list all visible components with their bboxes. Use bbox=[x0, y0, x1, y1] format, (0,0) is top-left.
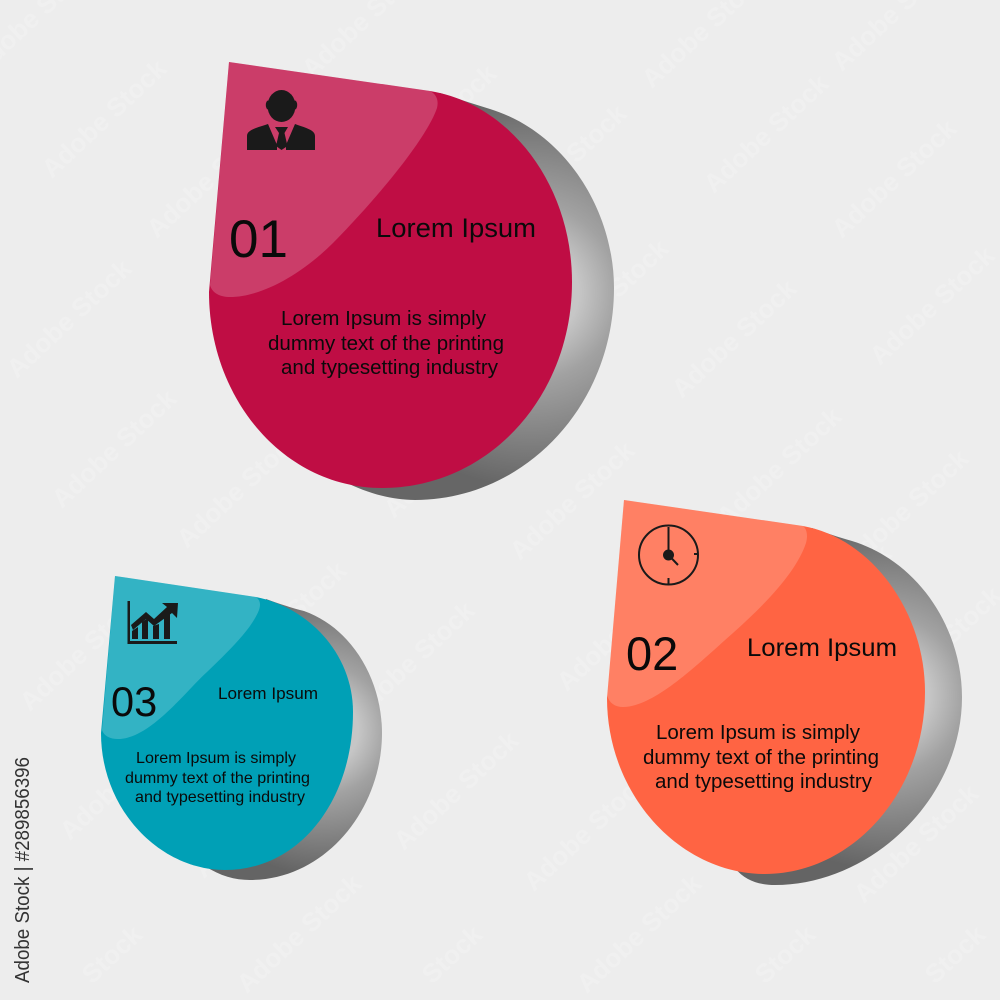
stock watermark pattern: Adobe Stock bbox=[141, 113, 278, 244]
stock watermark pattern: Adobe Stock bbox=[698, 68, 835, 199]
body text 02: and typesetting industry bbox=[655, 771, 873, 793]
stock watermark pattern: Adobe Stock bbox=[206, 223, 343, 354]
stock watermark pattern: Adobe Stock bbox=[711, 401, 848, 532]
drop body 02 bbox=[607, 500, 925, 874]
panel: drop 02 bbox=[607, 500, 962, 885]
stock watermark pattern: Adobe Stock bbox=[496, 98, 633, 229]
stock watermark pattern: Adobe Stock bbox=[378, 393, 515, 524]
3D side shadow 02 bbox=[735, 528, 962, 885]
body text 01: and typesetting industry bbox=[281, 357, 499, 379]
stock watermark pattern: Adobe Stock bbox=[366, 58, 503, 189]
body text 03: Lorem Ipsum is simply bbox=[136, 750, 296, 767]
stock watermark pattern: Adobe Stock bbox=[848, 778, 985, 909]
stock watermark pattern: Stock bbox=[76, 919, 148, 989]
stock watermark pattern: Adobe Stock bbox=[344, 595, 481, 726]
highlight 01 bbox=[210, 62, 438, 297]
stock watermark pattern: Adobe Stock bbox=[54, 715, 191, 846]
icon: businessman bbox=[247, 90, 315, 150]
stock watermark pattern: Adobe Stock bbox=[518, 766, 655, 897]
panel: drop 01 bbox=[209, 62, 614, 500]
stock watermark pattern: Adobe Stock bbox=[838, 443, 975, 574]
number 01: 01 bbox=[229, 210, 288, 269]
icon: growth chart bbox=[128, 601, 178, 644]
body text 03 bbox=[125, 750, 310, 806]
stock watermark pattern: Adobe Stock bbox=[538, 233, 675, 364]
body text 02 bbox=[643, 722, 879, 793]
stock watermark pattern: Adobe Stock bbox=[551, 566, 688, 697]
number 02: 02 bbox=[626, 627, 678, 680]
body text 01: dummy text of the printing bbox=[268, 333, 504, 355]
stock watermark pattern: Adobe Stock bbox=[388, 725, 525, 856]
stock watermark pattern: Adobe Stock bbox=[826, 113, 963, 244]
body text 03: dummy text of the printing bbox=[125, 770, 310, 787]
heading 01: Lorem Ipsum bbox=[376, 213, 536, 243]
stock watermark pattern: Adobe Stock bbox=[216, 555, 353, 686]
3D side shadow 01 bbox=[345, 93, 614, 500]
drop body 03 bbox=[101, 576, 353, 870]
stock watermark pattern: Adobe Stock bbox=[231, 868, 368, 999]
stock watermark pattern: Stock bbox=[919, 919, 991, 989]
stock watermark pattern: Adobe Stock bbox=[666, 273, 803, 404]
stock watermark pattern: Adobe Stock bbox=[188, 753, 325, 884]
highlight 02 bbox=[607, 500, 807, 707]
stock watermark pattern: Stock bbox=[749, 919, 821, 989]
stock watermark pattern: Adobe Stock bbox=[761, 538, 898, 669]
panel: drop 03 bbox=[101, 576, 382, 880]
stock watermark pattern: Adobe Stock bbox=[36, 53, 173, 184]
stock watermark pattern: Adobe Stock bbox=[719, 738, 856, 869]
stock watermark pattern: Adobe Stock bbox=[571, 868, 708, 999]
stock watermark pattern: Adobe Stock bbox=[46, 383, 183, 514]
highlight 03 bbox=[102, 576, 260, 739]
stock watermark pattern: Adobe Stock bbox=[171, 423, 308, 554]
body text 03: and typesetting industry bbox=[135, 789, 305, 806]
body text 01: Lorem Ipsum is simply bbox=[281, 308, 487, 330]
stock id label: Adobe Stock | #289856396 bbox=[12, 757, 34, 983]
body text 02: Lorem Ipsum is simply bbox=[656, 722, 861, 744]
body text 02: dummy text of the printing bbox=[643, 747, 879, 769]
stock watermark pattern: Adobe Stock bbox=[14, 586, 151, 717]
heading 03: Lorem Ipsum bbox=[218, 684, 318, 703]
stock watermark pattern: Adobe Stock bbox=[504, 435, 641, 566]
stock watermark pattern: Stock bbox=[416, 919, 488, 989]
body text 01 bbox=[268, 308, 504, 379]
3D side shadow 03 bbox=[205, 599, 382, 880]
drop body 01 bbox=[209, 62, 572, 488]
stock watermark pattern: Adobe Stock bbox=[864, 240, 1000, 371]
number 03: 03 bbox=[111, 678, 157, 725]
stock watermark pattern: Adobe Stock bbox=[336, 263, 473, 394]
stock watermark pattern: Adobe Stock bbox=[1, 253, 138, 384]
heading 02: Lorem Ipsum bbox=[747, 634, 897, 662]
icon: clock bbox=[639, 526, 698, 585]
